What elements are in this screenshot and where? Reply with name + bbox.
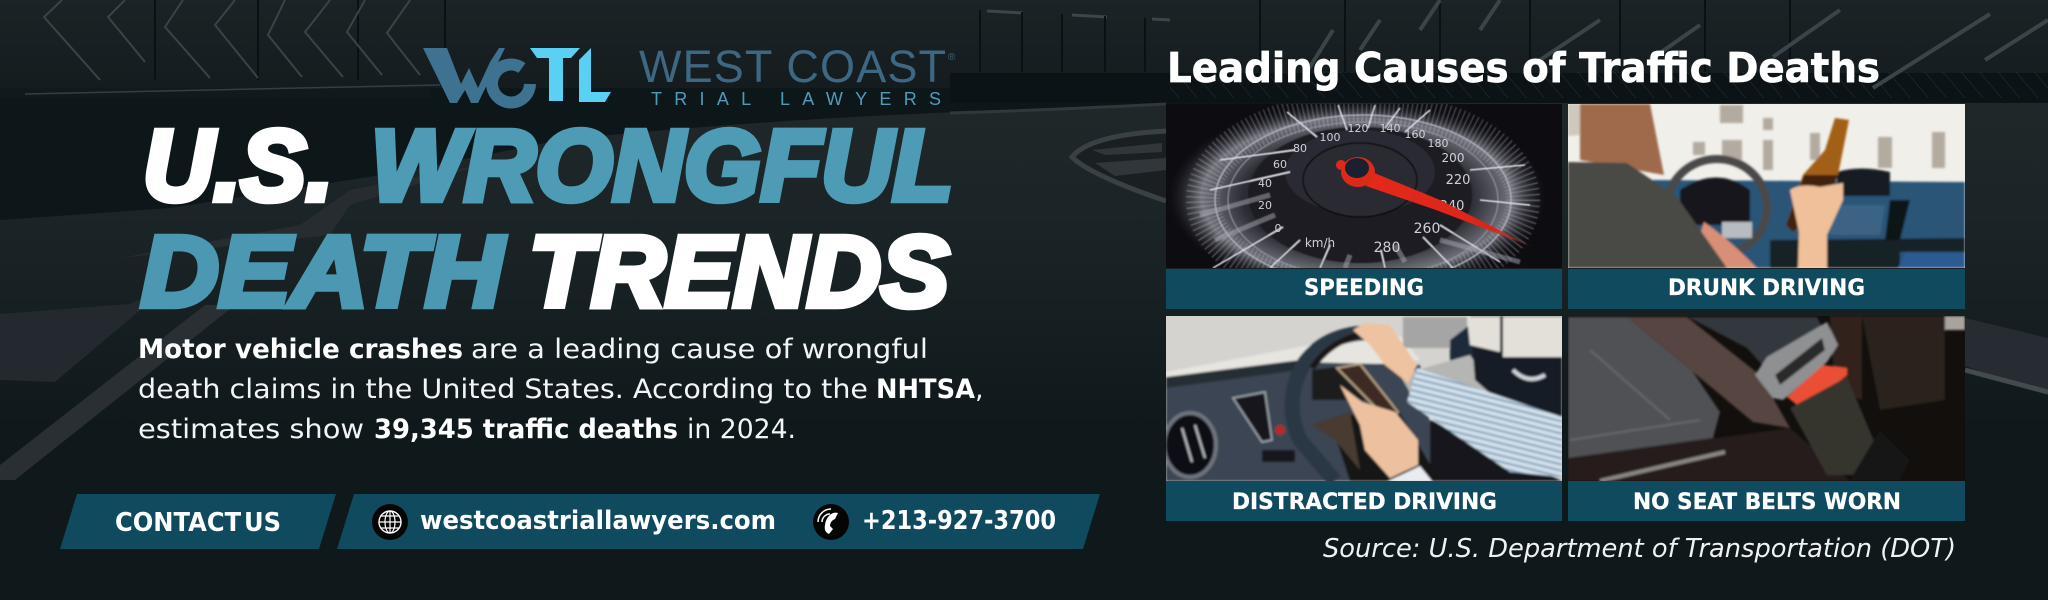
website: westcoastriallawyers.com [420,506,776,536]
title: TRENDS [529,216,949,328]
label: no seat belts worn [1568,481,1965,521]
photo: speedometer: 0 [1274,222,1282,235]
heading: leading causes: Leading Causes of Traffic Deaths [1167,44,1880,92]
photo: unfastened seat belt buckle [1568,316,1965,481]
photo: speedometer: 100 [1320,131,1340,144]
label: speeding [1166,269,1562,309]
photo: speedometer: 180 [1428,137,1448,150]
photo: speedometer: 160 [1404,128,1426,141]
title: WRONGFUL [371,110,953,222]
intro paragraph: 39,345 traffic deaths [374,414,678,445]
photo: speedometer: 240 [1440,199,1464,214]
label: distracted driving: DISTRACTED DRIVING [1232,490,1497,515]
photo: speedometer: 280 [1374,240,1400,256]
logo tagline: TRIAL LAWYERS [651,89,941,109]
icon: phone [813,504,849,540]
intro paragraph: , [975,374,984,405]
intro paragraph: in 2024. [687,414,796,445]
photo: driver holding a beer bottle [1568,104,1965,268]
logo mark: WCTL [423,48,611,103]
logo: West Coast Trial Lawyers [423,41,956,109]
icon: globe [372,504,408,540]
label: no seat belts worn: NO SEAT BELTS WORN [1633,490,1901,515]
intro paragraph: death claims in the United States. According to the [138,374,868,405]
photo: speedometer: 60 [1273,158,1287,171]
title: DEATH [141,216,505,328]
photo: speedometer: km/h [1305,236,1335,250]
intro paragraph: Motor vehicle crashes [138,334,463,365]
photo: speedometer: 80 [1293,142,1307,155]
title: U.S. [143,110,333,222]
registered mark: ® [948,52,956,63]
contact us button: CONTACT US [115,508,281,538]
photo: speedometer [1166,104,1562,268]
intro paragraph: estimates show [138,414,364,445]
photo: speedometer: 220 [1446,173,1470,188]
panel: drunk driving [1568,104,1965,309]
label: speeding: SPEEDING [1304,276,1424,301]
photo: speedometer: 260 [1414,221,1440,237]
title [141,110,953,328]
source note: Source: U.S. Department of Transportation (DOT) [1323,534,1956,564]
intro paragraph: NHTSA [876,374,975,405]
panel: speeding [1166,101,1562,309]
label: distracted driving [1166,481,1562,521]
photo: speedometer: 20 [1258,199,1272,212]
logo wordmark: WEST COAST [639,41,946,92]
panel: no seat belts worn [1568,316,1965,521]
intro paragraph: are a leading cause of wrongful [471,334,928,365]
contact us button [60,494,336,549]
phone number: +213-927-3700 [862,506,1056,536]
label: drunk driving: DRUNK DRIVING [1668,276,1865,301]
panel: distracted driving [1164,316,1562,521]
contact details bar [337,494,1100,549]
photo: speedometer: 200 [1442,151,1464,165]
photo: driver using a phone [1164,316,1562,481]
photo: speedometer: 140 [1380,122,1400,135]
label: drunk driving [1568,269,1965,309]
photo: speedometer: 40 [1258,177,1272,190]
photo: speedometer: 120 [1348,122,1368,135]
intro paragraph [138,334,984,445]
